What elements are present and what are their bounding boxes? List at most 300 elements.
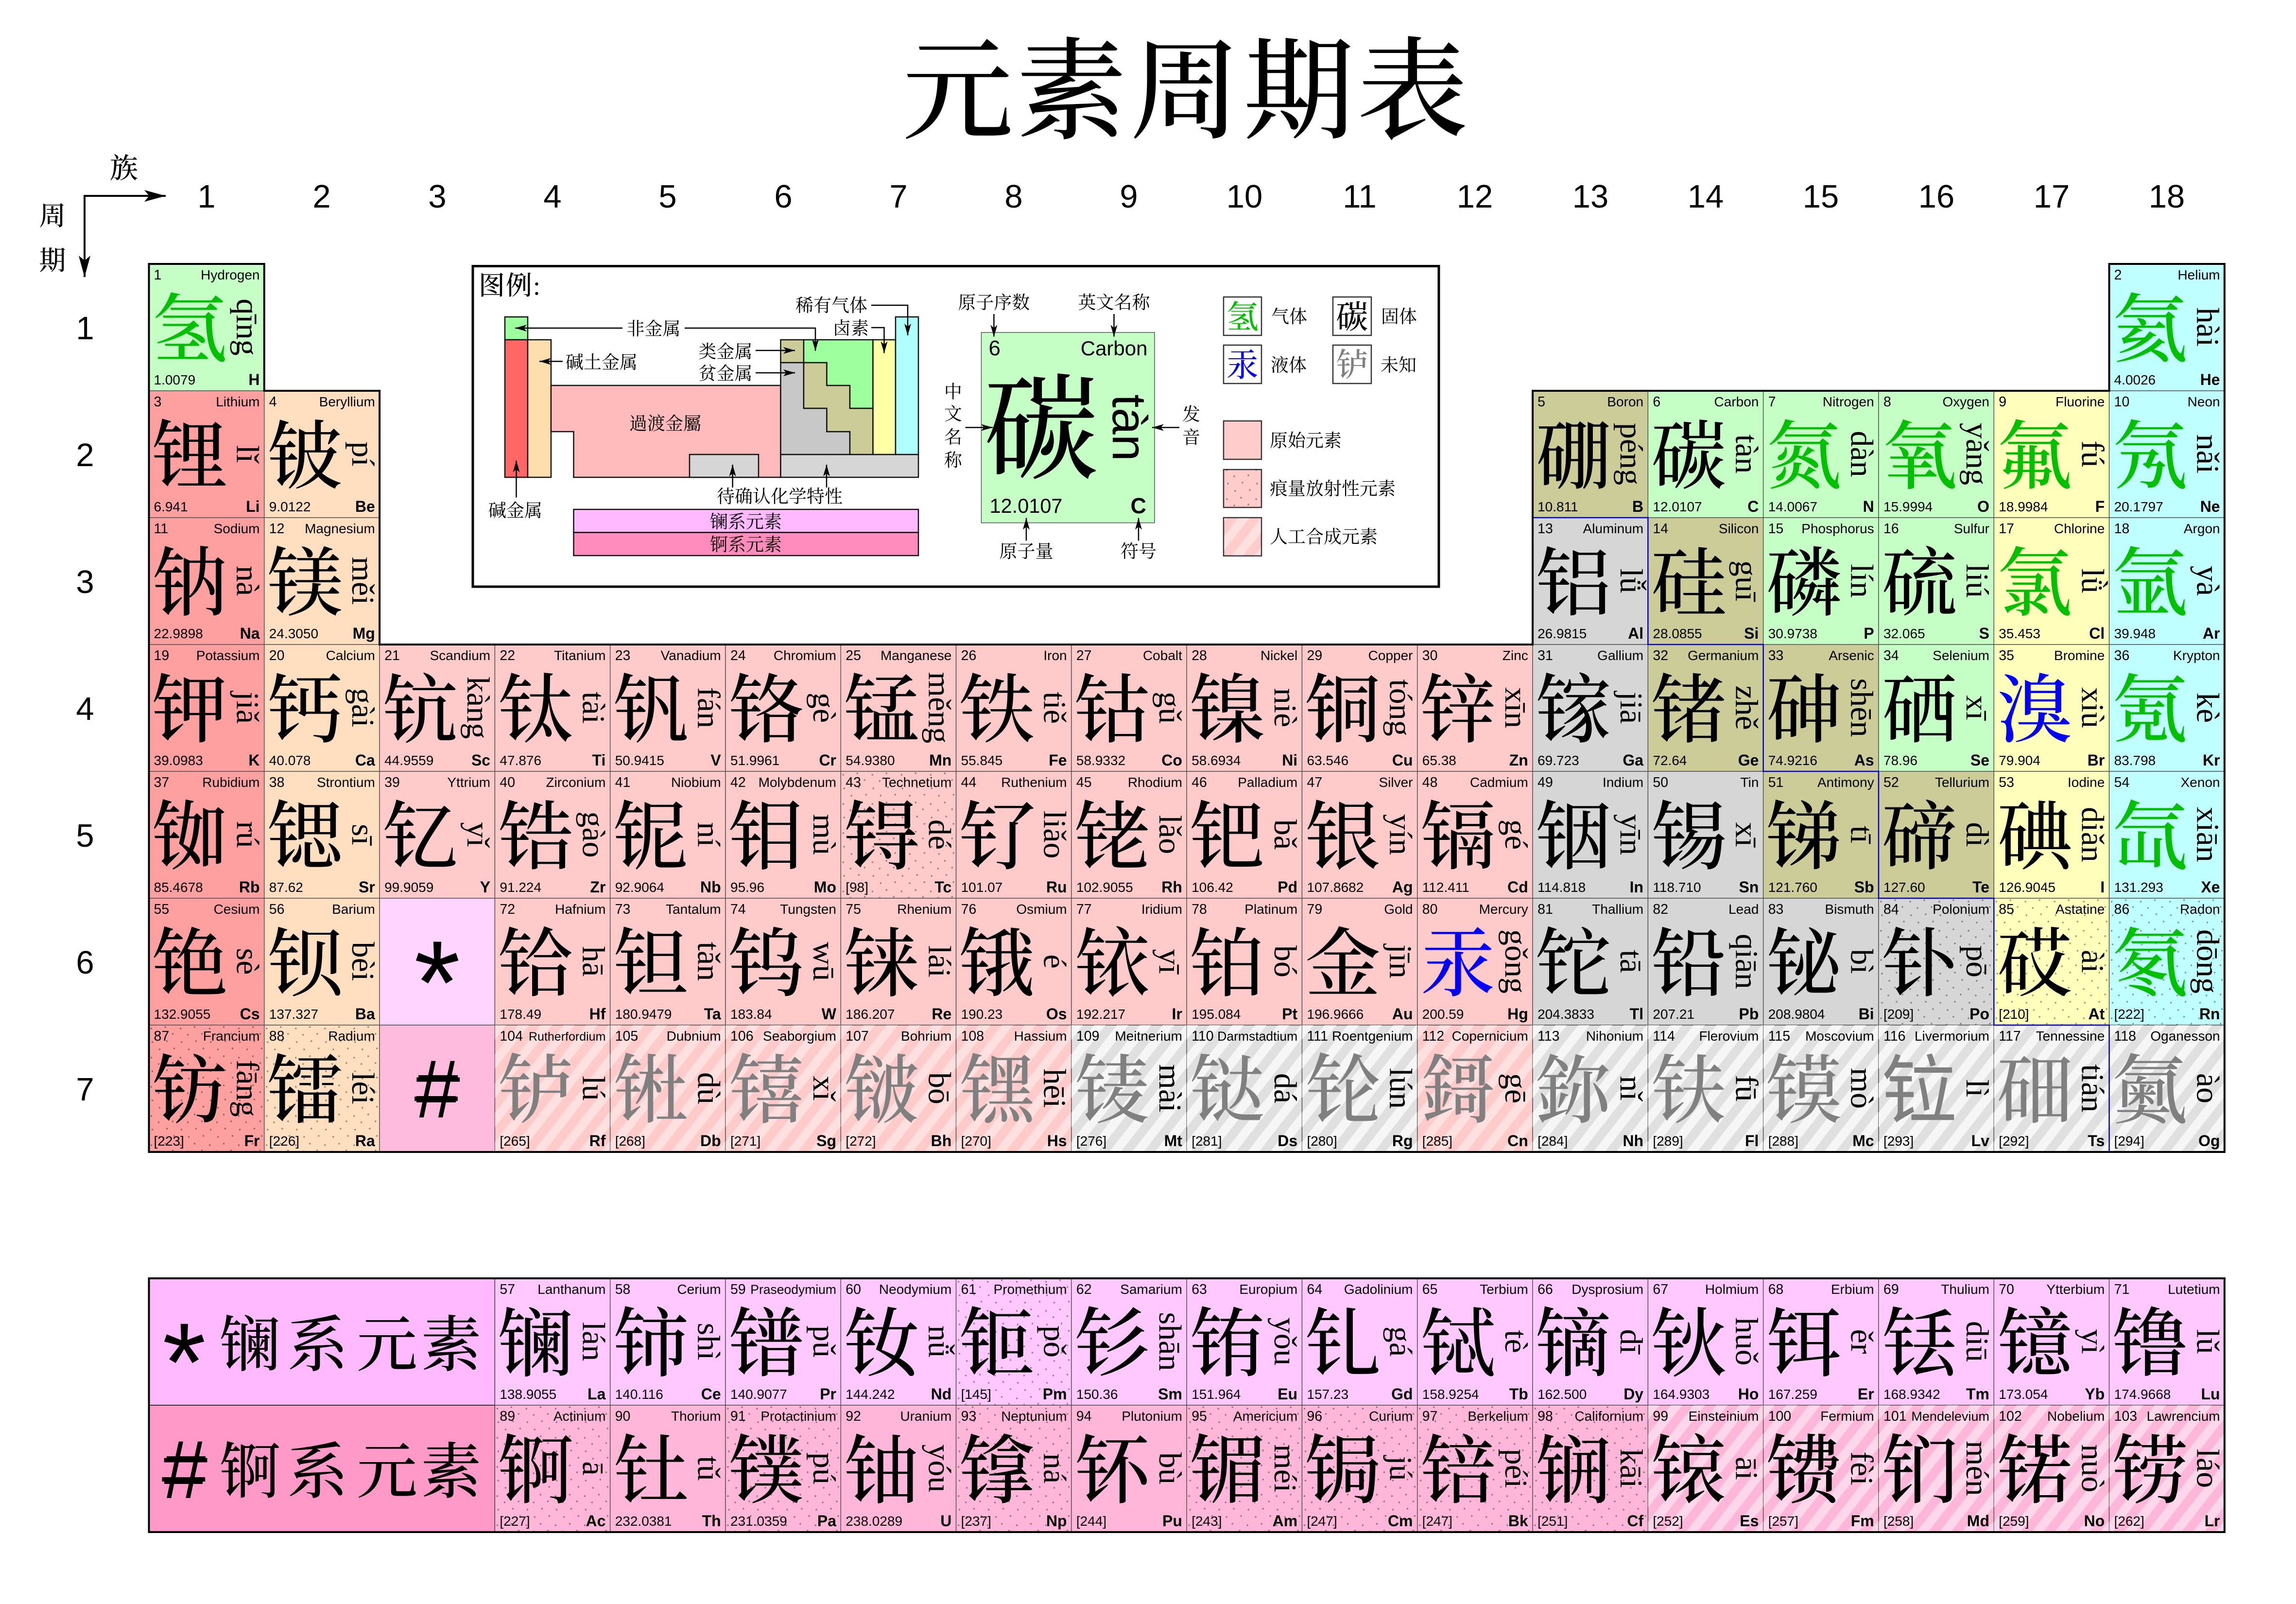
Lawrencium: 铹 bbox=[2112, 1430, 2188, 1514]
Lutetium: 174.9668 bbox=[2114, 1387, 2171, 1402]
Ytterbium: Ytterbium bbox=[2046, 1282, 2105, 1297]
Cadmium: Cadmium bbox=[1470, 775, 1528, 790]
Antimony: Sb bbox=[1854, 878, 1874, 896]
Radon bbox=[2109, 898, 2226, 1025]
Technetium: Tc bbox=[934, 878, 951, 896]
Carbon: 碳 bbox=[1651, 416, 1726, 499]
Tellurium: 127.60 bbox=[1883, 880, 1925, 895]
Copernicium: 鎶 bbox=[1420, 1050, 1496, 1133]
Indium: 49 bbox=[1537, 775, 1553, 790]
Hafnium: Hafnium bbox=[555, 902, 605, 917]
Copernicium: Copernicium bbox=[1452, 1029, 1528, 1044]
Cesium: 55 bbox=[154, 902, 169, 917]
mini map labels: 类金属 bbox=[699, 342, 752, 362]
key card labels: 文 bbox=[944, 404, 962, 424]
Gallium: 31 bbox=[1537, 648, 1553, 663]
Praseodymium: Pr bbox=[820, 1385, 836, 1403]
Tungsten: 183.84 bbox=[730, 1007, 772, 1022]
Potassium: 19 bbox=[154, 648, 169, 663]
Tantalum: tǎn bbox=[691, 942, 726, 981]
Lead: Pb bbox=[1739, 1005, 1759, 1023]
mini map labels: 待确认化学特性 bbox=[717, 487, 843, 507]
Samarium: shān bbox=[1152, 1312, 1188, 1371]
Californium: kāi bbox=[1613, 1449, 1649, 1488]
Hafnium: 铪 bbox=[498, 923, 573, 1007]
Radium bbox=[264, 1025, 380, 1152]
Arsenic bbox=[1763, 645, 1880, 771]
group numbers: 1 bbox=[197, 178, 216, 215]
Rubidium bbox=[149, 771, 265, 898]
Actinium: Ac bbox=[586, 1512, 605, 1530]
Lanthanum: La bbox=[587, 1385, 606, 1403]
Ytterbium: 镱 bbox=[1997, 1303, 2075, 1387]
Neon: Neon bbox=[2188, 394, 2220, 409]
Nihonium: nǐ bbox=[1613, 1076, 1649, 1101]
Palladium bbox=[1187, 771, 1303, 898]
Nihonium: Nihonium bbox=[1586, 1029, 1643, 1044]
Uranium: 238.0289 bbox=[846, 1514, 902, 1529]
Holmium: huǒ bbox=[1728, 1317, 1764, 1366]
Gold: Au bbox=[1392, 1005, 1413, 1023]
Astatine: Astatine bbox=[2055, 902, 2105, 917]
Seaborgium bbox=[725, 1025, 842, 1152]
carbon key card: C bbox=[1130, 493, 1146, 518]
Yttrium: yǐ bbox=[460, 822, 496, 848]
Americium: Am bbox=[1273, 1512, 1297, 1530]
occurrence key: trace radioactive: 痕量放射性元素 bbox=[1270, 479, 1396, 499]
Protactinium: Protactinium bbox=[760, 1409, 836, 1424]
metal / nonmetal blue staircase bbox=[1533, 518, 2109, 1152]
Neodymium: 60 bbox=[846, 1282, 861, 1297]
Tungsten: 钨 bbox=[729, 923, 804, 1007]
axis arrows bbox=[85, 196, 166, 277]
Berkelium: [247] bbox=[1422, 1514, 1452, 1529]
Americium: 镅 bbox=[1190, 1430, 1265, 1514]
Iron: 铁 bbox=[959, 669, 1035, 753]
occurrence key: primordial: 原始元素 bbox=[1270, 431, 1342, 451]
Californium: 锎 bbox=[1536, 1430, 1611, 1514]
Dysprosium: 162.500 bbox=[1537, 1387, 1587, 1402]
Dubnium: [268] bbox=[615, 1133, 645, 1149]
Xenon: Xenon bbox=[2181, 775, 2220, 790]
Hydrogen: 氢 bbox=[152, 289, 227, 372]
Niobium: 铌 bbox=[613, 796, 689, 880]
Germanium: 32 bbox=[1653, 648, 1668, 663]
Krypton: 36 bbox=[2114, 648, 2129, 663]
Neptunium: 93 bbox=[961, 1409, 976, 1424]
Curium: Cm bbox=[1388, 1512, 1413, 1530]
Manganese: 25 bbox=[846, 648, 861, 663]
Mercury: 80 bbox=[1422, 902, 1438, 917]
Argon: yà bbox=[2190, 566, 2226, 596]
Nitrogen: 14.0067 bbox=[1768, 499, 1817, 514]
Copper: 铜 bbox=[1305, 669, 1381, 753]
Vanadium: 23 bbox=[615, 648, 630, 663]
Chromium: Cr bbox=[819, 751, 836, 769]
Hydrogen: 1.0079 bbox=[154, 372, 195, 387]
Mendelevium: Md bbox=[1967, 1512, 1989, 1530]
Curium: 锔 bbox=[1305, 1430, 1381, 1514]
Oxygen: Oxygen bbox=[1943, 394, 1989, 409]
Seaborgium: xǐ bbox=[806, 1076, 842, 1101]
Francium: Francium bbox=[203, 1029, 259, 1044]
Oxygen: 氧 bbox=[1882, 416, 1957, 499]
Manganese: měng bbox=[921, 672, 957, 743]
Cerium: Cerium bbox=[677, 1282, 721, 1297]
Silicon: 14 bbox=[1653, 521, 1668, 537]
Berkelium: 锫 bbox=[1420, 1430, 1496, 1514]
Dubnium: Db bbox=[700, 1132, 721, 1150]
title: 元素周期表 bbox=[902, 32, 1468, 154]
group numbers: 11 bbox=[1343, 178, 1377, 215]
Antimony: 121.760 bbox=[1768, 880, 1817, 895]
Cerium: Ce bbox=[701, 1385, 721, 1403]
group numbers bbox=[197, 178, 2185, 215]
Thallium: tā bbox=[1613, 950, 1649, 973]
Tantalum: 钽 bbox=[613, 923, 689, 1007]
Chlorine: 17 bbox=[1999, 521, 2014, 537]
Yttrium bbox=[380, 771, 496, 898]
Berkelium bbox=[1417, 1405, 1534, 1532]
Magnesium: Mg bbox=[353, 625, 375, 642]
Bohrium: [272] bbox=[846, 1133, 876, 1149]
Cesium: 铯 bbox=[152, 923, 227, 1007]
Chlorine: Cl bbox=[2089, 625, 2105, 642]
Gallium: Gallium bbox=[1597, 648, 1643, 663]
state of matter key: solid: 固体 bbox=[1381, 307, 1417, 327]
Neodymium: Nd bbox=[931, 1385, 951, 1403]
Manganese: 锰 bbox=[844, 669, 919, 753]
Selenium: 硒 bbox=[1882, 669, 1957, 753]
Boron: 硼 bbox=[1536, 416, 1611, 499]
Hassium: 108 bbox=[961, 1029, 984, 1044]
Curium: Curium bbox=[1369, 1409, 1413, 1424]
Strontium: 87.62 bbox=[269, 880, 303, 895]
Flerovium: Flerovium bbox=[1699, 1029, 1759, 1044]
Silicon: 28.0855 bbox=[1653, 626, 1702, 641]
period numbers: 1 bbox=[76, 310, 94, 347]
axis label: period bbox=[39, 201, 66, 276]
Tellurium: Te bbox=[1972, 878, 1989, 896]
Silicon: Silicon bbox=[1719, 521, 1759, 536]
Dubnium: 105 bbox=[615, 1029, 638, 1044]
Promethium: Pm bbox=[1043, 1385, 1067, 1403]
Iodine: 53 bbox=[1999, 775, 2014, 790]
Cesium bbox=[149, 898, 265, 1025]
Gold: 79 bbox=[1307, 902, 1322, 917]
Flerovium: fū bbox=[1728, 1075, 1764, 1101]
state of matter key: unknown: 𬬻 bbox=[1336, 348, 1368, 384]
Copper: Cu bbox=[1392, 751, 1413, 769]
Silver: yín bbox=[1383, 814, 1418, 855]
Argon: Argon bbox=[2184, 521, 2220, 536]
Nitrogen: Nitrogen bbox=[1823, 394, 1874, 409]
Carbon: C bbox=[1747, 498, 1759, 515]
Dubnium bbox=[610, 1025, 726, 1152]
Zirconium: Zirconium bbox=[546, 775, 605, 790]
Silver: 107.8682 bbox=[1307, 880, 1364, 895]
Seaborgium: 106 bbox=[730, 1029, 754, 1044]
Neptunium: ná bbox=[1037, 1453, 1072, 1483]
state of matter key: unknown bbox=[1333, 345, 1416, 384]
Strontium: sī bbox=[345, 824, 380, 846]
Hassium: Hs bbox=[1047, 1132, 1067, 1150]
Lanthanum bbox=[495, 1278, 611, 1405]
Lead: 铅 bbox=[1651, 923, 1726, 1007]
Gold bbox=[1302, 898, 1418, 1025]
Thallium: 铊 bbox=[1536, 923, 1611, 1007]
Hydrogen: 1 bbox=[154, 267, 161, 283]
Nitrogen bbox=[1763, 391, 1880, 518]
Iridium: 192.217 bbox=[1076, 1007, 1125, 1022]
Tantalum: Ta bbox=[704, 1005, 721, 1023]
Molybdenum: 钼 bbox=[729, 796, 804, 880]
Ruthenium: 101.07 bbox=[961, 880, 1002, 895]
actinide placeholder: # bbox=[414, 1043, 460, 1135]
Europium: Europium bbox=[1239, 1282, 1297, 1297]
Livermorium: Livermorium bbox=[1915, 1029, 1989, 1044]
Palladium: 106.42 bbox=[1191, 880, 1233, 895]
Terbium: tè bbox=[1498, 1330, 1534, 1353]
Radium: 88 bbox=[269, 1029, 285, 1044]
Krypton: Krypton bbox=[2173, 648, 2220, 663]
Osmium: 76 bbox=[961, 902, 976, 917]
Sodium: Na bbox=[240, 625, 260, 642]
Chromium bbox=[725, 645, 842, 771]
Phosphorus: P bbox=[1864, 625, 1874, 642]
Rhodium: Rh bbox=[1161, 878, 1182, 896]
Dubnium: dù bbox=[691, 1072, 726, 1104]
Terbium: 158.9254 bbox=[1422, 1387, 1479, 1402]
lanthanide placeholder: * bbox=[414, 916, 460, 1049]
Germanium: Ge bbox=[1738, 751, 1759, 769]
Hafnium bbox=[495, 898, 611, 1025]
Cerium: 140.116 bbox=[615, 1387, 663, 1402]
mini map labels: 锕系元素 bbox=[710, 535, 782, 555]
Lithium: 6.941 bbox=[154, 499, 188, 514]
Praseodymium bbox=[725, 1278, 842, 1405]
Lutetium: Lutetium bbox=[2168, 1282, 2220, 1297]
Beryllium: Beryllium bbox=[319, 394, 375, 409]
Bismuth bbox=[1763, 898, 1880, 1025]
Titanium: tài bbox=[575, 692, 611, 724]
Lawrencium: Lr bbox=[2205, 1512, 2220, 1530]
series table outline bbox=[149, 1278, 2225, 1532]
Flerovium: Fl bbox=[1745, 1132, 1759, 1150]
Fluorine: 18.9984 bbox=[1999, 499, 2048, 514]
Osmium: Os bbox=[1046, 1005, 1067, 1023]
Silver: 银 bbox=[1305, 796, 1381, 880]
Chlorine: Chlorine bbox=[2054, 521, 2105, 536]
Berkelium: Berkelium bbox=[1467, 1409, 1528, 1424]
mini map labels: 镧系元素 bbox=[710, 512, 782, 532]
Hafnium: Hf bbox=[589, 1005, 606, 1023]
Francium: 87 bbox=[154, 1029, 169, 1044]
Cesium: sè bbox=[229, 948, 265, 975]
Meitnerium: 109 bbox=[1076, 1029, 1099, 1044]
Promethium: 钷 bbox=[959, 1303, 1035, 1387]
Dysprosium: dī bbox=[1613, 1329, 1649, 1355]
Krypton: 氪 bbox=[2112, 669, 2188, 753]
Arsenic: 砷 bbox=[1766, 669, 1842, 753]
Beryllium: pí bbox=[345, 441, 380, 467]
group numbers: 14 bbox=[1688, 178, 1724, 215]
Niobium: 41 bbox=[615, 775, 630, 790]
Potassium: jiǎ bbox=[229, 691, 265, 724]
group numbers: 12 bbox=[1457, 178, 1493, 215]
Protactinium: 231.0359 bbox=[730, 1514, 787, 1529]
Osmium: 190.23 bbox=[961, 1007, 1002, 1022]
occurrence key: trace radioactive bbox=[1224, 470, 1396, 507]
Beryllium: 铍 bbox=[267, 416, 343, 499]
panel: main periodic table bbox=[149, 264, 2226, 1152]
Fluorine: 9 bbox=[1999, 394, 2006, 410]
Ytterbium: yì bbox=[2074, 1329, 2110, 1354]
Thorium: tǔ bbox=[691, 1456, 726, 1481]
period numbers: 4 bbox=[76, 691, 94, 727]
Titanium: Ti bbox=[592, 751, 605, 769]
mini map labels bbox=[488, 296, 869, 555]
Europium: 63 bbox=[1191, 1282, 1207, 1297]
Tungsten bbox=[725, 898, 842, 1025]
Thorium bbox=[610, 1405, 726, 1532]
Lawrencium: [262] bbox=[2114, 1514, 2144, 1529]
Nihonium: 鉨 bbox=[1536, 1050, 1613, 1133]
Oxygen: O bbox=[1977, 498, 1989, 515]
Thorium: 钍 bbox=[613, 1430, 689, 1514]
Einsteinium: āi bbox=[1728, 1457, 1764, 1480]
Barium: bèi bbox=[345, 942, 380, 981]
Gold: 金 bbox=[1305, 923, 1381, 1007]
Bismuth: Bi bbox=[1859, 1005, 1874, 1023]
Indium: yīn bbox=[1613, 814, 1649, 855]
Plutonium: Pu bbox=[1162, 1512, 1182, 1530]
Thorium: 232.0381 bbox=[615, 1514, 672, 1529]
Mendelevium: 101 bbox=[1883, 1409, 1907, 1424]
Iron: tiě bbox=[1037, 692, 1072, 724]
Lanthanum: Lanthanum bbox=[537, 1282, 605, 1297]
mini map labels: 稀有气体 bbox=[795, 296, 867, 316]
Cesium: Cesium bbox=[214, 902, 259, 917]
Rhodium: lǎo bbox=[1152, 815, 1188, 854]
Americium bbox=[1187, 1405, 1303, 1532]
Terbium: 65 bbox=[1422, 1282, 1438, 1297]
group numbers: 16 bbox=[1918, 178, 1954, 215]
Mercury: 汞 bbox=[1420, 923, 1496, 1007]
Thorium: Thorium bbox=[671, 1409, 721, 1424]
Bohrium: Bh bbox=[931, 1132, 951, 1150]
Thulium: 铥 bbox=[1882, 1303, 1958, 1387]
Scandium: 钪 bbox=[383, 669, 458, 753]
Astatine: 85 bbox=[1999, 902, 2014, 917]
Oganesson: Og bbox=[2198, 1132, 2220, 1150]
Darmstadtium: [281] bbox=[1191, 1133, 1222, 1149]
Chromium: Chromium bbox=[774, 648, 836, 663]
Magnesium: 24.3050 bbox=[269, 626, 318, 641]
Americium: 95 bbox=[1191, 1409, 1207, 1424]
Zinc: 锌 bbox=[1420, 669, 1496, 753]
Zirconium: gào bbox=[575, 811, 611, 858]
Gadolinium: 157.23 bbox=[1307, 1387, 1348, 1402]
Radium: [226] bbox=[269, 1133, 299, 1149]
Tennessine: Ts bbox=[2088, 1132, 2105, 1150]
Osmium: é bbox=[1037, 954, 1072, 969]
Nitrogen: 氮 bbox=[1766, 416, 1842, 499]
Aluminum: Aluminum bbox=[1583, 521, 1643, 536]
Chlorine: 35.453 bbox=[1999, 626, 2040, 641]
Rutherfordium: [265] bbox=[500, 1133, 530, 1149]
key card labels: 英文名称 bbox=[1078, 293, 1150, 313]
Molybdenum: mù bbox=[806, 814, 842, 855]
Mercury: 200.59 bbox=[1422, 1007, 1464, 1022]
Barium: Barium bbox=[332, 902, 375, 917]
Copernicium: gē bbox=[1498, 1073, 1534, 1103]
Gallium: Ga bbox=[1623, 751, 1643, 769]
Titanium: 47.876 bbox=[500, 753, 541, 768]
Hydrogen bbox=[149, 264, 265, 391]
Livermorium: Lv bbox=[1971, 1132, 1989, 1150]
Cobalt: gǔ bbox=[1152, 692, 1188, 724]
Praseodymium: 镨 bbox=[729, 1303, 804, 1387]
Barium: 56 bbox=[269, 902, 285, 917]
Gallium bbox=[1533, 645, 1649, 771]
Nobelium: No bbox=[2084, 1512, 2105, 1530]
Calcium: Ca bbox=[355, 751, 375, 769]
Promethium: Promethium bbox=[994, 1282, 1067, 1297]
Molybdenum: Mo bbox=[814, 878, 836, 896]
Moscovium: [288] bbox=[1768, 1133, 1798, 1149]
Tungsten: wū bbox=[806, 942, 842, 981]
Neodymium: Neodymium bbox=[879, 1282, 951, 1297]
Samarium bbox=[1071, 1278, 1188, 1405]
Germanium: Germanium bbox=[1688, 648, 1759, 663]
Tennessine: tián bbox=[2074, 1064, 2110, 1112]
Titanium: Titanium bbox=[554, 648, 605, 663]
Lead: Lead bbox=[1728, 902, 1759, 917]
Roentgenium: 111 bbox=[1307, 1029, 1328, 1044]
carbon key card: Carbon bbox=[1081, 337, 1148, 360]
Bismuth: 208.9804 bbox=[1768, 1007, 1825, 1022]
Lead: qiān bbox=[1728, 934, 1764, 989]
Thallium bbox=[1533, 898, 1649, 1025]
Chlorine bbox=[1994, 518, 2110, 645]
Flerovium: [289] bbox=[1653, 1133, 1683, 1149]
Cadmium: gé bbox=[1498, 819, 1534, 850]
Silicon: 硅 bbox=[1651, 542, 1726, 626]
Magnesium bbox=[264, 518, 380, 645]
Gold: 196.9666 bbox=[1307, 1007, 1364, 1022]
Chromium: 24 bbox=[730, 648, 746, 663]
Meitnerium: mài bbox=[1152, 1064, 1188, 1112]
key card arrows bbox=[966, 314, 1179, 540]
Plutonium bbox=[1071, 1405, 1188, 1532]
Germanium: zhě bbox=[1728, 685, 1764, 730]
Rubidium: 37 bbox=[154, 775, 169, 790]
Curium bbox=[1302, 1405, 1418, 1532]
Tennessine: Tennessine bbox=[2036, 1029, 2105, 1044]
Nobelium: nuò bbox=[2074, 1445, 2110, 1492]
Iodine: diǎn bbox=[2074, 807, 2110, 862]
Tungsten: W bbox=[822, 1005, 837, 1023]
key card labels: 原子序数 bbox=[958, 293, 1030, 313]
Iron: 26 bbox=[961, 648, 976, 663]
Tantalum bbox=[610, 898, 726, 1025]
Indium: 114.818 bbox=[1537, 880, 1586, 895]
Scandium: 44.9559 bbox=[384, 753, 433, 768]
Rhodium: 45 bbox=[1076, 775, 1092, 790]
mini map labels: 卤素 bbox=[833, 318, 869, 339]
Palladium: Palladium bbox=[1238, 775, 1297, 790]
